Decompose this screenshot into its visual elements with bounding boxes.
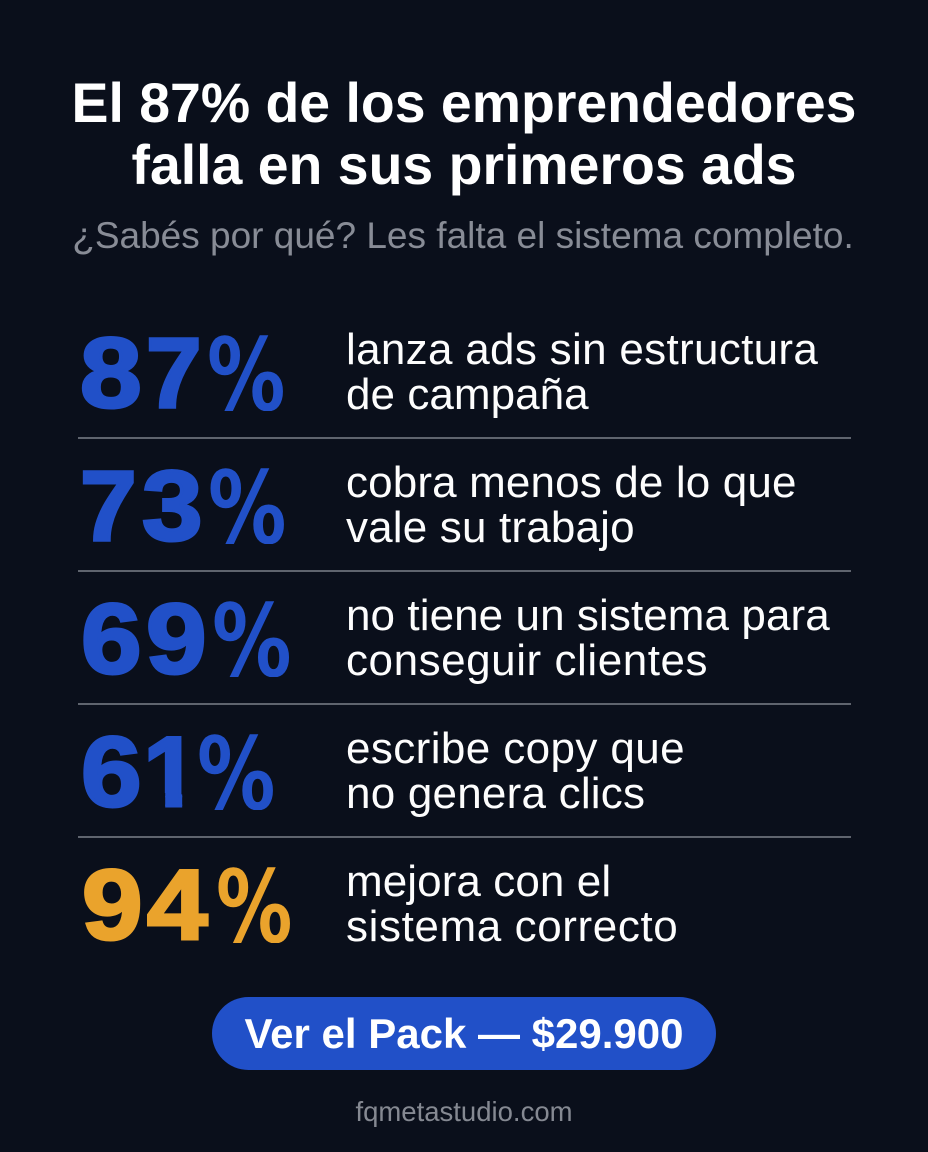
stat row: 61%: 6 bbox=[80, 716, 141, 827]
stat row: 87%: lanza ads sin estructura bbox=[346, 325, 818, 374]
stat row: 61%: % bbox=[197, 715, 275, 833]
stat row: 87%: % bbox=[207, 316, 285, 434]
stat row: 73%: 3 bbox=[142, 450, 202, 561]
stat row: 73%: 7 bbox=[80, 450, 136, 561]
stat row: 73%: % bbox=[208, 449, 286, 567]
stat row: 87%: 8 bbox=[80, 317, 142, 428]
stat row: 69%: conseguir clientes bbox=[346, 636, 708, 684]
call to action button bbox=[212, 997, 716, 1070]
stat row: 61%: no genera clics bbox=[346, 768, 645, 818]
stat row: 69%: % bbox=[212, 582, 292, 700]
stat row: 73%: vale su trabajo bbox=[346, 502, 635, 552]
stat row: 94% highlighted: sistema correcto bbox=[346, 902, 678, 950]
stat row: 94% highlighted: 4 bbox=[147, 849, 208, 960]
subtitle: ¿Sabés por qué? Les falta el sistema completo. bbox=[72, 215, 854, 256]
title: El 87% de los emprendedores bbox=[72, 72, 856, 134]
stat row: 94% highlighted: 9 bbox=[82, 849, 142, 960]
stat row: 61%: 1 bbox=[143, 716, 198, 827]
stat row: 73%: cobra menos de lo que bbox=[346, 458, 797, 507]
stat row: 87%: 7 bbox=[146, 317, 201, 428]
stat row: 69% bbox=[80, 583, 830, 694]
stat row: 61%: escribe copy que bbox=[346, 724, 685, 773]
stat row: 73% bbox=[80, 450, 797, 561]
title bbox=[72, 72, 856, 196]
stat row: 87% bbox=[80, 317, 818, 428]
title: falla en sus primeros ads bbox=[132, 134, 796, 196]
call to action button: Ver el Pack — $29.900 bbox=[244, 1010, 684, 1057]
stat row: 87%: de campaña bbox=[346, 370, 589, 418]
stat row: 94% highlighted: mejora con el bbox=[346, 857, 611, 906]
stat row: 69%: no tiene un sistema para bbox=[346, 591, 830, 640]
stat row: 94% highlighted: % bbox=[216, 848, 292, 966]
stat row: 61% bbox=[80, 716, 685, 827]
stat row: 69%: 6 bbox=[80, 583, 141, 694]
stat row: 94% highlighted bbox=[82, 849, 678, 960]
stat row: 69%: 9 bbox=[146, 583, 206, 694]
website footer: fqmetastudio.com bbox=[355, 1096, 573, 1127]
